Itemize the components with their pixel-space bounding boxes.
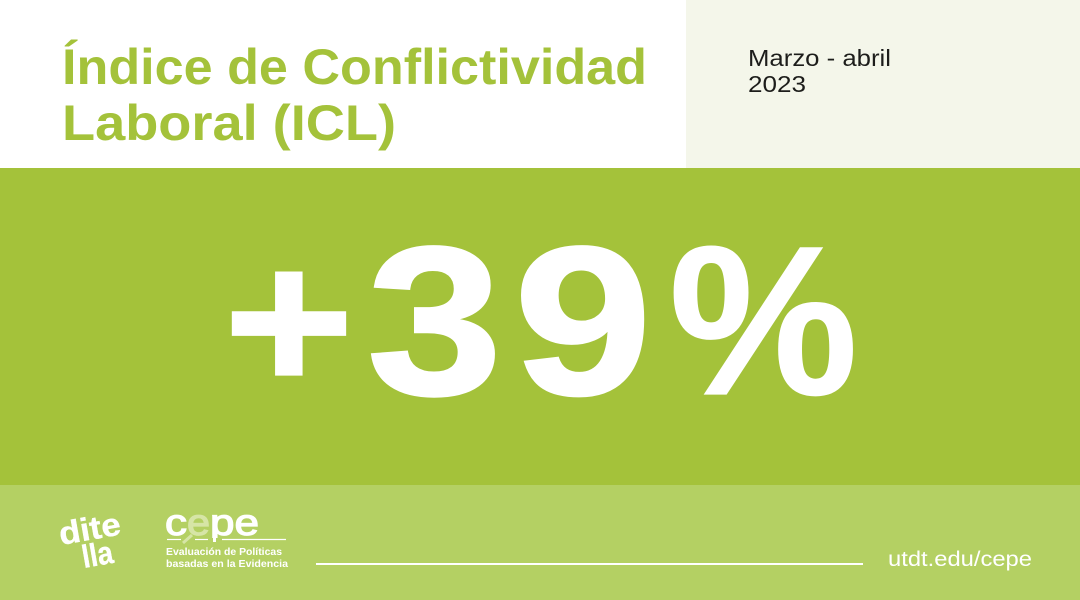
logo: ditella (56, 506, 123, 575)
title: Índice de Conflictividad (62, 39, 647, 95)
headline figure: +39% (224, 203, 858, 440)
logo: cepe: c (165, 502, 187, 543)
footer url: utdt.edu/cepe (888, 548, 1032, 571)
panel: main green band (0, 168, 1080, 485)
panel: footer band (0, 485, 1080, 600)
panel: header left background (0, 0, 686, 168)
headline figure: +39%: 3 (367, 204, 502, 439)
panel: header date background (686, 0, 1080, 168)
logo: ditella: lla (79, 534, 116, 575)
logo: cepe: pe (210, 502, 259, 543)
logo: cepe: e (187, 502, 210, 543)
title (62, 39, 647, 151)
logo: cepe: Evaluación de Políticas (166, 546, 282, 558)
date text (748, 45, 891, 97)
date text: 2023 (748, 71, 806, 97)
logo: ditella: dite (56, 506, 123, 552)
headline figure: +39%: + (224, 209, 354, 433)
headline figure: +39%: 9 (514, 203, 652, 439)
headline figure: +39%: % (669, 203, 858, 440)
logo: cepe (166, 514, 288, 567)
logo: cepe: basadas en la Evidencia (166, 558, 288, 570)
footer rule (316, 563, 863, 565)
date text: Marzo - abril (748, 45, 891, 71)
title: Laboral (ICL) (62, 95, 396, 151)
